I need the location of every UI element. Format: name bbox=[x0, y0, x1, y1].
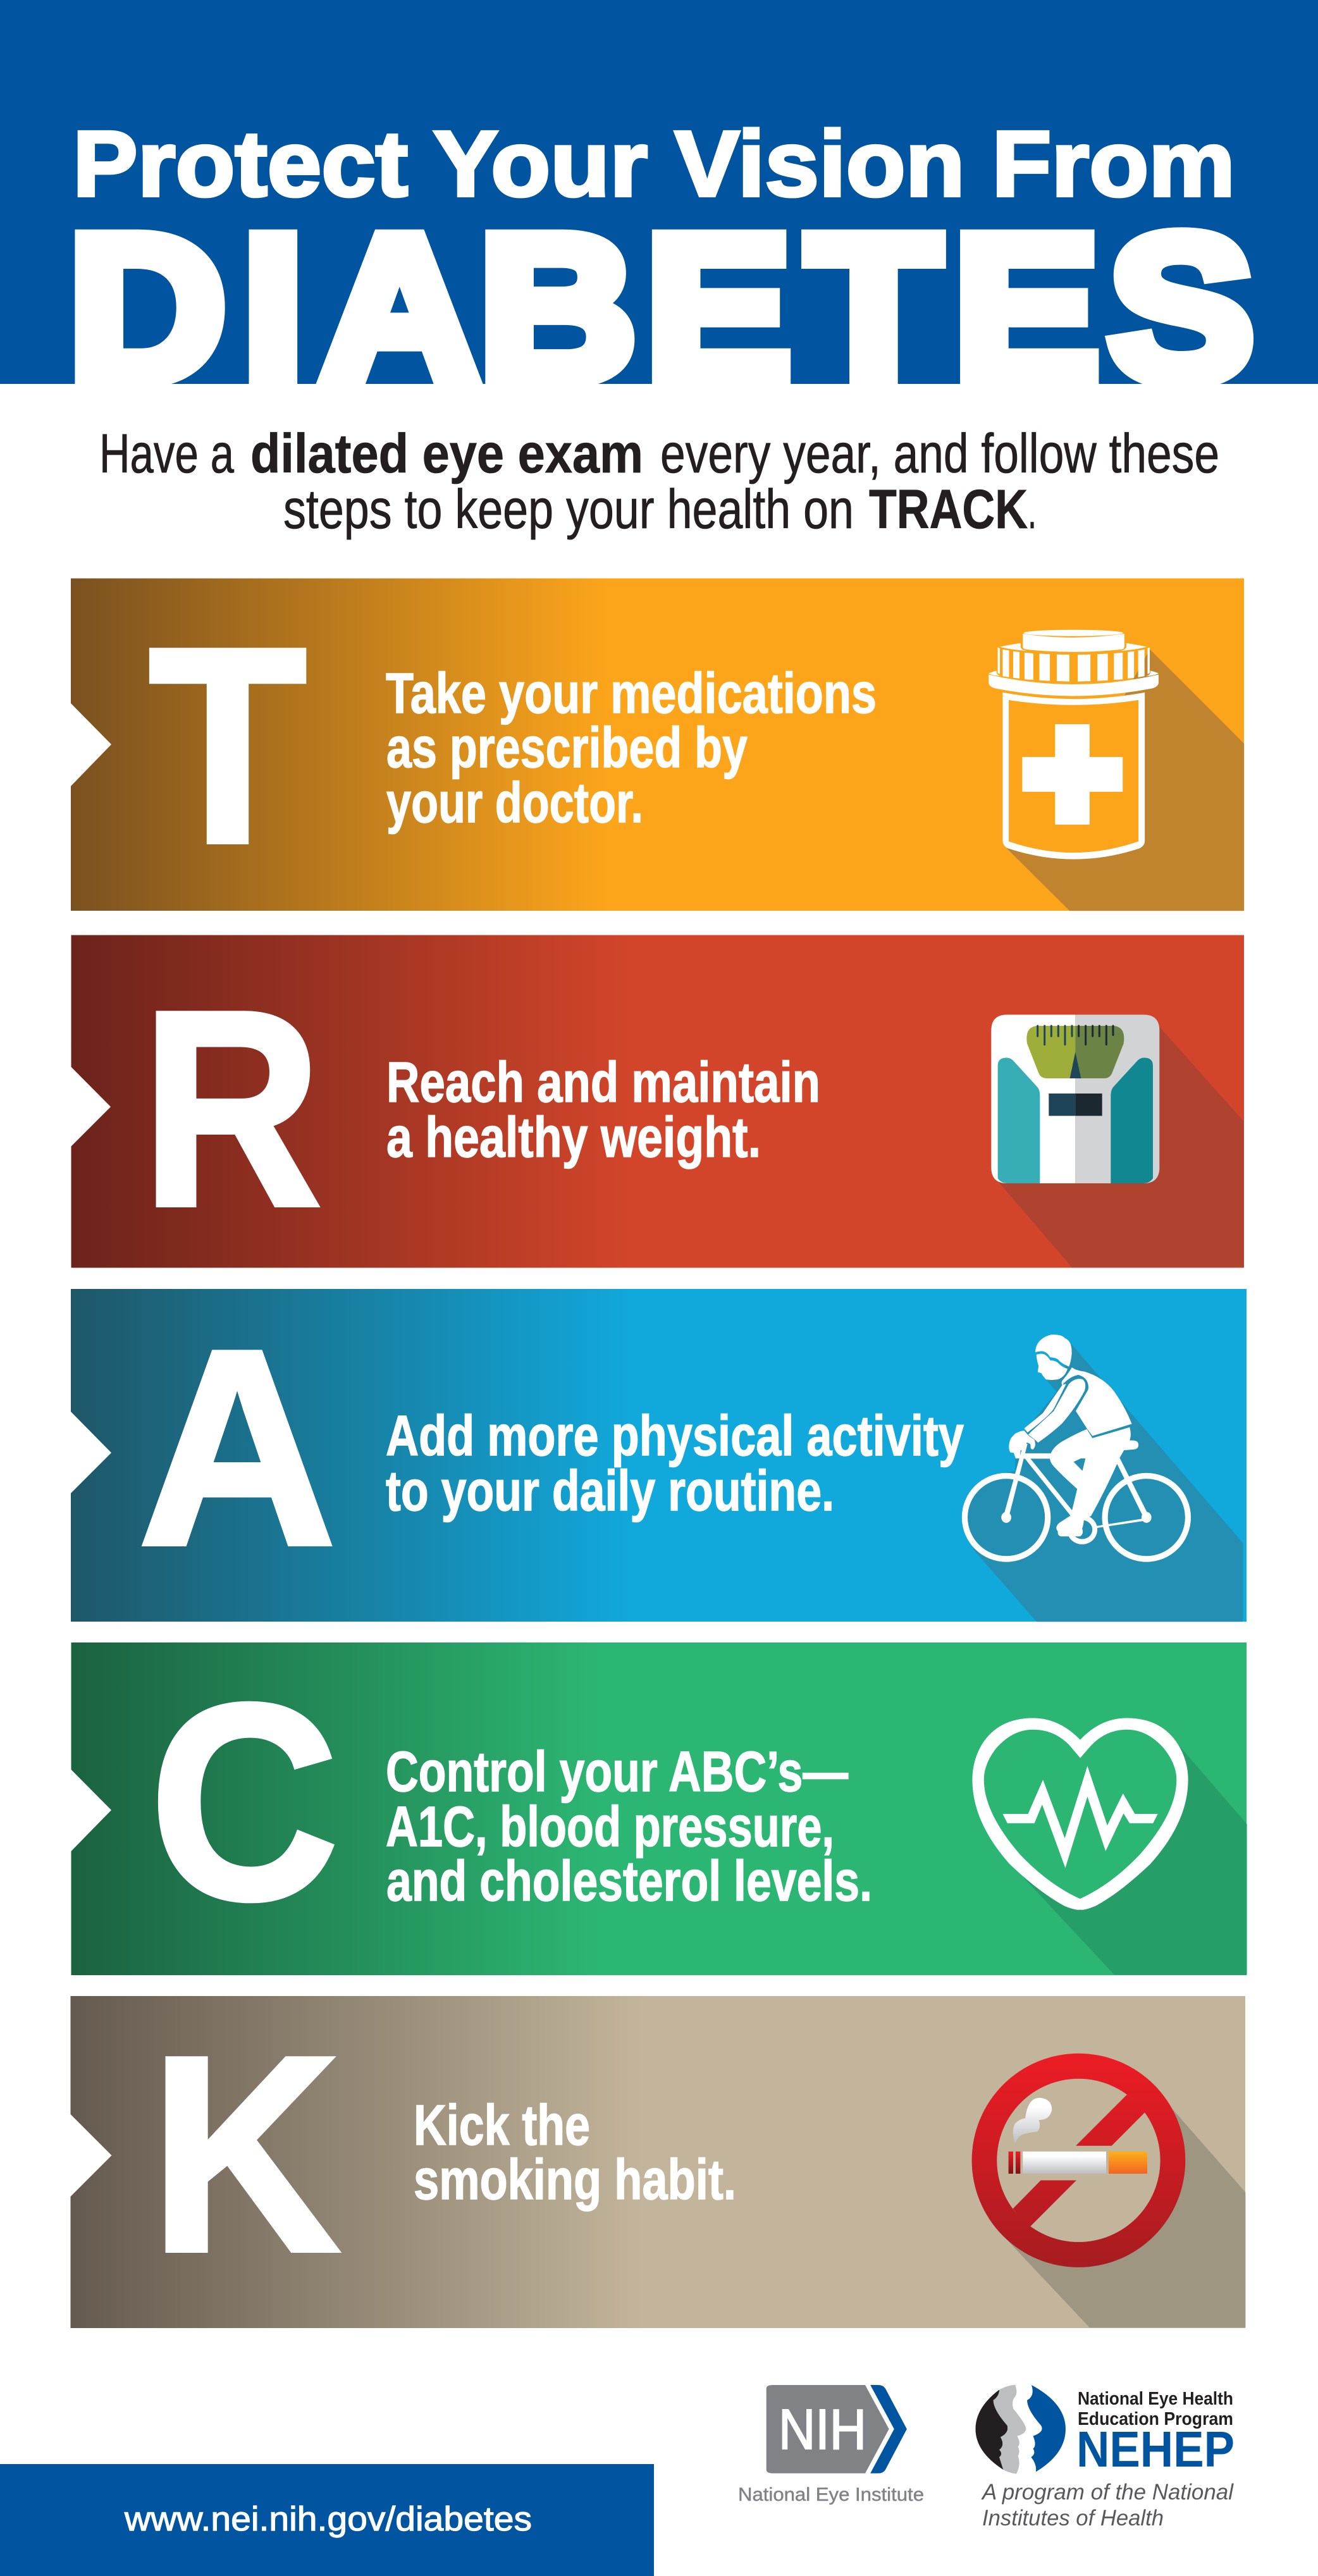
logo: NEHEP: NEHEP bbox=[1076, 2421, 1235, 2477]
text: kick smoking bbox=[414, 2094, 736, 2212]
icon: no smoking sign bbox=[972, 2054, 1245, 2327]
text: take medications bbox=[386, 662, 877, 835]
text: take medications: Take your medications bbox=[386, 662, 877, 725]
text: physical activity: to your daily routine. bbox=[386, 1460, 834, 1523]
icon: heart with pulse bbox=[972, 1718, 1247, 1975]
logo: NEHEP: Education Program bbox=[1078, 2409, 1233, 2429]
title line: DIABETES: DIABETES bbox=[69, 192, 1253, 423]
text: control ABCs: A1C, blood pressure, bbox=[386, 1796, 834, 1859]
panel: R - healthy weight bbox=[71, 935, 1244, 1267]
logo: NIH National Eye Institute: NIH bbox=[779, 2398, 866, 2462]
icon: bathroom scale bbox=[991, 1014, 1244, 1267]
intro text: TRACK bbox=[869, 479, 1028, 540]
intro text: Have a bbox=[99, 423, 234, 484]
intro text bbox=[99, 423, 1219, 540]
text: healthy weight: a healthy weight. bbox=[386, 1106, 761, 1169]
panel: T - take medications bbox=[71, 578, 1244, 911]
logo: NEHEP bbox=[975, 2385, 1235, 2530]
text: healthy weight: Reach and maintain bbox=[386, 1051, 820, 1114]
letter K: K bbox=[151, 1999, 339, 2310]
intro text: . bbox=[1028, 479, 1037, 540]
letter C: C bbox=[150, 1646, 338, 1957]
URL text: www.nei.nih.gov/diabetes bbox=[124, 2500, 532, 2538]
text: take medications: as prescribed by bbox=[386, 717, 748, 780]
letter R: R bbox=[142, 954, 321, 1264]
header band bbox=[0, 0, 1318, 423]
icon: pill bottle bbox=[988, 630, 1244, 911]
letter T: T bbox=[149, 590, 307, 901]
text: control ABCs bbox=[386, 1741, 872, 1913]
panel: K - kick smoking bbox=[71, 1996, 1245, 2328]
panel: A - physical activity bbox=[71, 1289, 1247, 1622]
title line: Protect Your Vision From: Protect Your Vision From bbox=[73, 113, 1235, 216]
logo: NEHEP: National Eye Health bbox=[1078, 2389, 1233, 2409]
footer URL bar bbox=[0, 2464, 654, 2576]
logo: NIH National Eye Institute: National Eye Institute bbox=[738, 2484, 924, 2505]
icon: cyclist bbox=[962, 1334, 1243, 1622]
letter A: A bbox=[139, 1292, 336, 1603]
text: control ABCs: Control your ABC’s— bbox=[386, 1741, 848, 1804]
logo: NIH National Eye Institute bbox=[738, 2385, 924, 2505]
text: kick smoking: smoking habit. bbox=[414, 2148, 736, 2212]
text: kick smoking: Kick the bbox=[414, 2094, 590, 2157]
text: take medications: your doctor. bbox=[386, 772, 643, 835]
text: physical activity: Add more physical activity bbox=[386, 1405, 964, 1468]
logo: NEHEP: A program of the National bbox=[981, 2480, 1234, 2505]
text: physical activity bbox=[386, 1405, 964, 1523]
text: healthy weight bbox=[386, 1051, 820, 1169]
intro text: steps to keep your health on bbox=[283, 479, 854, 540]
intro text: dilated eye exam bbox=[250, 423, 643, 484]
panel: C - control ABCs bbox=[71, 1642, 1247, 1975]
text: control ABCs: and cholesterol levels. bbox=[386, 1850, 872, 1913]
logo: NEHEP: Institutes of Health bbox=[982, 2506, 1164, 2530]
